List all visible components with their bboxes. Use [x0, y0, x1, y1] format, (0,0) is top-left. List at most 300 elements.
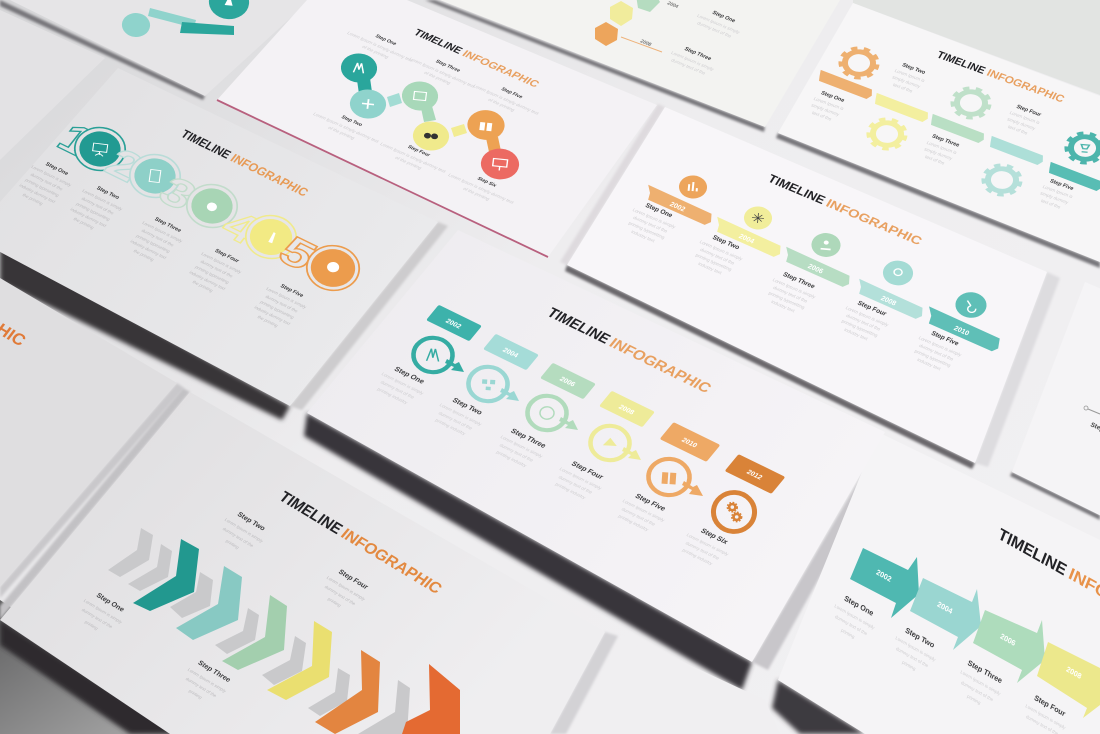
step text: Five: [247, 279, 314, 333]
step text: Five: of the printing: [487, 97, 516, 112]
step text: Three: Lorem Ipsum is simply: [141, 220, 184, 244]
tag: 2008: 2008: [617, 404, 635, 416]
step text: One: Lorem Ipsum is simply: [30, 164, 73, 188]
step text: Five: Step Five: [1049, 178, 1074, 192]
step text: Four: dummy text of the: [199, 259, 234, 279]
step text: Two: [428, 393, 492, 439]
step text: Four: industry text: [843, 327, 869, 341]
step text: Four: text of the: [1007, 124, 1029, 136]
step text: Two: Lorem Ipsum is simply: [699, 239, 744, 262]
step text: Two: [887, 61, 930, 96]
step text: One: [341, 24, 421, 68]
step text: Six: Lorem Ipsum is simply dummy text: [447, 173, 516, 205]
step text: Two: printing: [225, 539, 241, 550]
step text: Three: industry dummy text: [129, 239, 168, 260]
panel: top-left clipped slide: [10, 0, 310, 96]
panel: gears ribbon slide: [778, 3, 1100, 262]
step 3 number and circle: 3: [149, 168, 206, 219]
circle: step four: [411, 120, 451, 152]
step text: Three: printing typesetting: [768, 291, 806, 310]
ribbon: 2010 teal: 2010: [952, 325, 970, 337]
step text: Six: Step Six: [476, 176, 498, 189]
step text: Four: Lorem Ipsum is simply dummy text: [379, 142, 448, 174]
arrow: 2004: 2004: [936, 599, 955, 616]
step text: Two: Lorem Ipsum is simply: [895, 635, 937, 663]
step text: Four: Step Four: [570, 459, 606, 481]
step text: One: Lorem Ipsum is simply: [380, 372, 425, 396]
step text: Two: dummy text of the: [80, 196, 115, 216]
step 5 number and circle: [269, 228, 362, 293]
step text: One: Step One: [44, 162, 69, 177]
step text: Three: [175, 658, 236, 708]
step 5 number and circle: 5: [269, 228, 326, 279]
tag: 2006: [540, 363, 596, 399]
year label 2004: 2004: [666, 1, 680, 10]
year label 2008: 2008: [639, 39, 653, 48]
step text: One: Step One: [95, 592, 125, 614]
title: INFOGRAPHIC: [228, 152, 311, 199]
circle: step two: [348, 88, 388, 120]
step text: Two: of the printing: [327, 125, 356, 140]
step text: Three: Lorem Ipsum is: [926, 140, 958, 155]
tag: 2012: 2012: [745, 469, 763, 481]
title: TIMELINE: [996, 526, 1069, 580]
title: [275, 489, 445, 598]
step text: Three: Step Three: [509, 426, 548, 450]
step text: Three: Step Three: [931, 134, 960, 149]
step text: Two: simply dummy: [891, 75, 922, 89]
ribbon: 2008 light teal: 2008: [879, 295, 897, 307]
step text: Three: Lorem Ipsum is simply: [499, 435, 544, 459]
title: [178, 127, 311, 199]
timeline line: [621, 37, 662, 52]
chevron: green: [222, 595, 287, 670]
step text: Three: Lorem Ipsum is simply: [960, 669, 1002, 697]
step text: Two: Step Two: [901, 62, 927, 76]
step text: Three: the printing: [132, 249, 156, 262]
ribbon: light teal: [986, 136, 1046, 166]
panel: numbered circles slide: [0, 68, 438, 406]
step text: Three: printing: [966, 694, 982, 706]
gear: orange: [840, 47, 878, 79]
step text: Two: Step Two: [340, 115, 364, 128]
panel: far top-left blank slide: [0, 10, 105, 160]
ribbon: 2008 light teal: [851, 279, 927, 320]
step text: One: Lorem Ipsum is simply dummy text: [346, 31, 415, 63]
step text: Five: dummy text of the: [918, 343, 955, 362]
ribbon: 2006 green: 2006: [806, 263, 824, 275]
step text: Two: Lorem Ipsum is simply: [224, 517, 265, 544]
grey chevrons: [108, 528, 410, 734]
step text: Four: dummy text of the: [845, 313, 882, 332]
gear: teal: [1066, 132, 1100, 164]
ring and arrow: step four: [589, 425, 641, 461]
step text: Four: dummy text of the: [324, 584, 357, 606]
step text: Three: Step Three: [153, 217, 182, 234]
step text: Five: Step Five: [930, 330, 960, 347]
ring and arrow: step six: [712, 491, 756, 533]
step text: One: Lorem Ipsum is simply: [696, 13, 742, 35]
step text: Three: dummy text of the: [772, 285, 809, 304]
step text: Three: dummy text of the: [140, 228, 175, 248]
step text: One: Step One: [820, 90, 845, 104]
hexagon: green: [636, 0, 660, 12]
step text: Three: [123, 213, 190, 267]
step 2 number and circle: 2: [96, 140, 153, 191]
step text: Four: [314, 566, 375, 616]
ring and arrow: step two: [467, 366, 519, 402]
icon circle: orange: [678, 174, 708, 200]
step text: Three: [666, 43, 721, 78]
step text: Two: printing industry: [434, 418, 467, 436]
icon circle: green: [810, 232, 842, 258]
step text: One: dummy text of the: [81, 607, 114, 629]
step text: Four: Lorem Ipsum is simply: [558, 467, 603, 491]
step text: Six: Step Six: [699, 526, 730, 546]
step text: Four: Step Four: [856, 300, 888, 318]
step text: Two: Step Two: [451, 396, 485, 417]
step text: Three: printing industry: [495, 450, 528, 468]
arrow: 2006: 2006: [999, 631, 1017, 648]
step text: Two: industry dummy text: [69, 207, 108, 228]
connectors: [357, 78, 501, 152]
step text: Five: Lorem Ipsum is simply: [918, 335, 963, 358]
step text: Three: [403, 50, 483, 94]
title: [765, 172, 925, 248]
step text: One: [692, 6, 747, 41]
step text: Three: Lorem Ipsum is simply dummy text: [408, 57, 477, 89]
step text: Three: dummy text of the: [185, 676, 218, 698]
gear: green: [952, 87, 990, 119]
step text: One: simply dummy: [810, 103, 841, 117]
step text: Three: text of the: [924, 154, 946, 166]
step text: Four: Step Four: [406, 144, 431, 158]
panel: ribbon timeline slide: [567, 107, 1047, 463]
step text: Five: dummy text of the: [620, 507, 657, 527]
step text: Two: Step Two: [711, 234, 741, 251]
tag: 2006: 2006: [558, 376, 576, 388]
step text: One: Lorem Ipsum is simply: [632, 207, 677, 230]
step text: Three: simply dummy: [923, 147, 954, 161]
tag: 2010: 2010: [680, 437, 698, 449]
step text: Four: Step Four: [337, 569, 369, 591]
step text: Three: of the printing: [423, 70, 452, 85]
step text: Three: Lorem Ipsum is simply: [772, 277, 817, 300]
step text: Five: Lorem Ipsum is: [1042, 184, 1074, 199]
ribbon: teal: [1045, 162, 1100, 192]
step text: Five: Lorem Ipsum is simply dummy text: [472, 84, 541, 116]
title: [996, 526, 1100, 645]
step text: One: industry dummy text: [18, 183, 57, 204]
step text: One: Step One: [843, 593, 875, 618]
step text: Three: Step Three: [683, 46, 712, 62]
tag: 2008: [599, 391, 655, 427]
step text: One: dummy text of the: [696, 21, 733, 39]
connector bars: [148, 8, 234, 35]
ribbon: green: [927, 114, 987, 144]
icon circle: light teal: [882, 260, 914, 286]
step text: Three: [953, 656, 1007, 713]
title: [411, 28, 541, 90]
step text: Two: printing typesetting: [695, 253, 733, 272]
tag: 2004: [483, 334, 539, 370]
circle: step one: [339, 52, 379, 84]
step text: One: Lorem Ipsum is: [813, 96, 845, 111]
gear: yellow: [868, 118, 906, 150]
step text: Five: Lorem Ipsum is simply: [621, 499, 666, 523]
step text: Two: industry text: [697, 261, 723, 275]
panel: chevron timeline slide: [0, 392, 605, 734]
step text: Six: dummy text of the: [684, 541, 721, 561]
panel: left slide with clipped title: [0, 278, 177, 587]
step text: Three: Lorem Ipsum is simply: [670, 50, 716, 72]
step text: Five: Step Five: [633, 492, 668, 513]
step text: One: printing typesetting: [24, 178, 61, 198]
step text: One: of the printing: [361, 44, 390, 59]
step text: Two: printing: [901, 660, 917, 672]
step text: Two: dummy text of the: [222, 526, 255, 548]
panel: bottom centre blank slide: [580, 642, 780, 734]
arrow: 2006: [973, 610, 1045, 683]
step text: One: printing: [84, 620, 100, 631]
title: INFOGRAPHIC: [823, 196, 925, 248]
tag: 2002: [426, 305, 482, 341]
step text: Six: Lorem Ipsum is simply: [685, 533, 730, 557]
step text: Five: [1035, 177, 1078, 212]
step text: One: Step One: [711, 10, 736, 24]
step text: Four: simply dummy: [1006, 117, 1037, 131]
step text: Three: industry text: [770, 299, 796, 313]
step text: Five: [611, 489, 675, 535]
step text: Two: Lorem Ipsum is simply: [438, 403, 483, 427]
chevron: yellow: [267, 621, 332, 700]
step text: Two: Step Two: [236, 511, 266, 532]
tag: 2010: [660, 422, 720, 462]
ribbon: orange: [815, 70, 875, 100]
step text: Two: text of the: [892, 82, 914, 94]
ring and arrow: step one: [412, 337, 464, 373]
panel: top centre hexagon slide: [440, 0, 840, 127]
step text: One: Step One: [644, 202, 674, 219]
step text: Five: printing typesetting: [259, 300, 296, 320]
title: INFOGRAPHIC: [984, 67, 1067, 105]
step text: One: Lorem Ipsum is simply: [834, 603, 876, 631]
step text: Five: [907, 327, 968, 376]
step 4 number and circle: 4: [212, 202, 269, 253]
step text: Four: printing typesetting: [841, 319, 879, 338]
step text: Two: [688, 231, 749, 280]
step text: Five: Step Five: [500, 87, 524, 100]
step text: Five: simply dummy: [1039, 191, 1070, 205]
step text: Four: Lorem Ipsum is simply: [845, 305, 890, 328]
title: TIMELINE: [543, 305, 614, 347]
chevron: light teal: [176, 566, 242, 640]
step text: Four: [374, 135, 454, 179]
step text: Six: printing industry: [681, 548, 714, 566]
step text: Two: [307, 105, 387, 149]
step text: One: Step One: [374, 34, 398, 47]
tag: 2004: 2004: [501, 347, 519, 359]
chevron: red-orange: [402, 664, 460, 734]
step text: Two: Step Two: [95, 186, 121, 201]
step text: Four: of the printing: [394, 155, 423, 170]
step text: Two: [212, 508, 273, 558]
step text: Four: dummy text of the: [557, 475, 594, 495]
step text: One: [827, 590, 881, 647]
step text: One: [370, 362, 434, 408]
tag: 2002: 2002: [444, 318, 462, 330]
step text: One: printing industry: [376, 387, 409, 405]
step text: Three: [489, 425, 553, 471]
step text: Three: printing: [188, 689, 204, 700]
step text: Four: printing industry: [554, 482, 587, 500]
step text: Three: Step Three: [966, 658, 1003, 685]
circle: step three: [400, 80, 440, 112]
ribbon: yellow: [871, 93, 931, 123]
hexagon: yellow: [610, 1, 633, 26]
step text: Two: dummy text of the: [895, 646, 929, 669]
panel: arrows timeline slide: [778, 432, 1100, 734]
step text: One: dummy text of the: [379, 380, 416, 400]
step text: One: printing: [840, 628, 856, 640]
step text: Two: Step Two: [904, 625, 936, 650]
step 1 number and circle: 1: [48, 115, 105, 166]
step 2 number and circle: [96, 140, 183, 200]
circle: step six: [479, 147, 521, 181]
step text: One: [621, 199, 682, 248]
step text: Two: the printing: [72, 217, 96, 230]
step text: Five: printing industry: [617, 514, 650, 532]
panel: connected circles slide: [217, 0, 657, 257]
step text: Four: [548, 457, 612, 503]
title: INFOGRAPHIC: [606, 335, 715, 396]
step text: One: dummy text of the: [632, 215, 669, 234]
step text: Two: Lorem Ipsum is: [894, 68, 926, 83]
step text: Five: industry dummy text: [253, 305, 292, 326]
title: TIMELINE: [411, 28, 464, 56]
icon circle: teal: [954, 291, 988, 319]
step text: Four: [834, 297, 895, 346]
step text: Three: dummy text of the: [960, 680, 994, 703]
step text: Five: [467, 77, 547, 121]
step text: Four: [1021, 690, 1072, 734]
ring and arrow: step three: [526, 395, 578, 431]
step text: One: dummy text of the: [834, 614, 868, 637]
step text: Four: printing typesetting: [194, 265, 231, 285]
step text: Five: industry text: [916, 357, 942, 371]
step text: One: printing typesetting: [628, 221, 666, 240]
step text: Four: Step Four: [213, 248, 241, 265]
title: TIMELINE: [765, 172, 828, 207]
step text: Four: printing: [327, 597, 343, 608]
step text: Four: Lorem Ipsum is simply: [200, 251, 243, 275]
panel: ring timeline slide: [307, 230, 885, 662]
icon circle: yellow: [743, 205, 773, 231]
gear: light teal: [983, 164, 1021, 196]
step text: Two: [63, 181, 130, 235]
step text: Two: printing typesetting: [75, 202, 112, 222]
step text: Three: dummy text of the: [670, 58, 707, 76]
panel: far right slide: [1012, 282, 1100, 540]
step text: Five: Step Five: [279, 284, 304, 299]
chevron: orange: [315, 650, 380, 734]
step text: One: [12, 157, 79, 211]
step text: One: Lorem Ipsum is simply: [83, 598, 124, 625]
step text: Three: Step Three: [196, 660, 232, 684]
step text: Two: Lorem Ipsum is simply: [81, 188, 124, 212]
arrow: 2008: 2008: [1065, 664, 1083, 681]
step text: Three: dummy text of the: [498, 443, 535, 463]
hexagon: orange: [595, 22, 618, 46]
step 1 number and circle: [48, 115, 128, 173]
chevron: teal: [133, 539, 199, 611]
ribbon: 2006 green: [778, 247, 854, 288]
step text: Three: [919, 133, 962, 168]
ribbon: 2004 yellow: 2004: [737, 233, 755, 245]
step text: Four: Lorem Ipsum is: [1009, 110, 1041, 125]
step text: Four: Step Four: [1033, 693, 1067, 718]
step text: One: dummy text of the: [29, 172, 64, 192]
step text: Three: Lorem Ipsum is simply: [187, 667, 228, 694]
step text: One: [71, 589, 132, 639]
marker ring and line: [1084, 406, 1100, 414]
step text: One: Step One: [393, 365, 427, 385]
step text: One: text of the: [811, 110, 833, 122]
step text: Three: printing typesetting: [135, 234, 172, 254]
tag: 2012: [725, 454, 785, 494]
title: TIMELINE: [935, 49, 987, 77]
title: TIMELINE: [275, 489, 346, 538]
step text: Six: of the printing: [462, 186, 491, 201]
title: [935, 49, 1067, 105]
arrow: 2008: [1037, 642, 1100, 718]
step text: One: the printing: [21, 193, 45, 206]
title: INFOGRAPHIC: [337, 526, 445, 598]
step text: Four: the printing: [191, 280, 215, 293]
step text: Three: Step Three: [434, 59, 462, 74]
step text: Four: Lorem Ipsum is simply: [326, 575, 367, 602]
ribbon: 2002 orange: [640, 185, 716, 226]
step text: Four: industry dummy text: [188, 270, 227, 291]
circle: light teal: [121, 12, 151, 38]
step text: Five: printing typesetting: [914, 349, 952, 368]
title: TIMELINE: [178, 127, 234, 161]
arrow: 2002: [850, 548, 919, 618]
step text: Four: [1002, 103, 1045, 138]
step text: Five: the printing: [256, 315, 280, 328]
ring and arrow: step five: [647, 458, 703, 496]
step text: Three: [761, 269, 822, 318]
step text: Six: [442, 166, 522, 210]
step text: Two: Lorem Ipsum is simply dummy text: [312, 112, 381, 144]
title: INFOGRAPHIC: [460, 49, 541, 90]
circle: step five: [466, 108, 506, 142]
step 3 number and circle: [149, 168, 240, 230]
ribbon: 2010 teal: [920, 306, 1004, 353]
title: [543, 305, 715, 396]
pink slide edge: [217, 100, 548, 257]
step text: Four: Lorem Ipsum is simply: [1025, 703, 1067, 731]
step text: Six: [675, 523, 739, 569]
circle: teal: [207, 0, 251, 21]
arrow: 2002: 2002: [875, 567, 893, 584]
ribbon: 2004 yellow: [709, 217, 785, 258]
step text: Four: [182, 244, 249, 298]
step text: One: [806, 89, 849, 124]
arrow: 2004: [910, 578, 981, 650]
step text: Five: Lorem Ipsum is simply: [265, 286, 308, 310]
step text: Three: Step Three: [781, 271, 816, 290]
